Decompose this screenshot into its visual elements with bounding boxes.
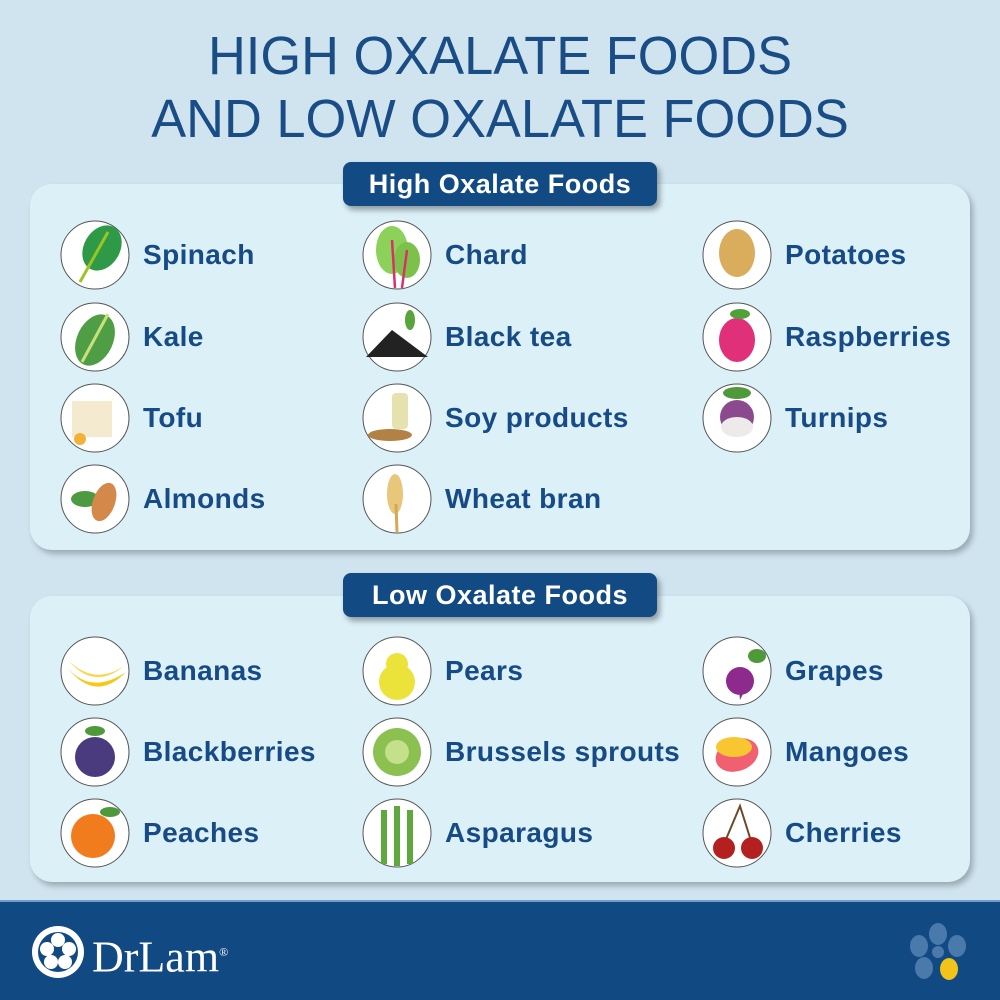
- item: peaches: Peaches: [143, 817, 259, 848]
- tab: high oxalate heading: High Oxalate Foods: [369, 169, 631, 199]
- item: cherries: [702, 798, 902, 868]
- title: AND LOW OXALATE FOODS: [151, 89, 849, 149]
- item: blackberries: [60, 718, 316, 786]
- item: almonds: [60, 464, 266, 534]
- item: chard: Chard: [445, 239, 528, 270]
- item: pears: Pears: [445, 655, 523, 686]
- tab: high oxalate heading: [343, 162, 657, 206]
- item: turnips: [702, 384, 888, 452]
- item: bananas: Bananas: [143, 655, 263, 686]
- item: potatoes: [702, 220, 906, 290]
- item: spinach: [60, 220, 255, 290]
- title: [151, 26, 849, 149]
- item: wheat bran: [362, 464, 601, 534]
- panel: high oxalate: [30, 184, 970, 550]
- item: grapes: [702, 636, 884, 706]
- item: kale: [60, 302, 204, 372]
- item: tofu: [60, 384, 203, 452]
- item: tofu: Tofu: [143, 402, 203, 433]
- item: pears: [362, 636, 523, 706]
- item: brussels sprouts: [362, 718, 680, 786]
- logo: DrLam: [32, 926, 228, 982]
- item: grapes: Grapes: [785, 655, 884, 686]
- item: chard: [362, 220, 528, 290]
- item: cherries: Cherries: [785, 817, 902, 848]
- item: black tea: Black tea: [445, 321, 572, 352]
- item: raspberries: [702, 302, 951, 372]
- item: bananas: [60, 636, 263, 706]
- tab: low oxalate heading: Low Oxalate Foods: [372, 580, 628, 610]
- title: HIGH OXALATE FOODS: [208, 26, 792, 86]
- item: spinach: Spinach: [143, 239, 255, 270]
- item: turnips: Turnips: [785, 402, 888, 433]
- item: mangoes: [702, 718, 909, 786]
- item: asparagus: [362, 798, 593, 868]
- icon: flower mark: [910, 923, 966, 980]
- panel: low oxalate: [30, 596, 970, 882]
- item: soy products: Soy products: [445, 402, 629, 433]
- item: black tea: [362, 302, 572, 372]
- item: asparagus: Asparagus: [445, 817, 593, 848]
- item: raspberries: Raspberries: [785, 321, 951, 352]
- tab: low oxalate heading: [343, 573, 657, 617]
- item: almonds: Almonds: [143, 483, 266, 514]
- item: peaches: [60, 798, 259, 868]
- footer: [0, 900, 1000, 1000]
- logo: DrLam: DrLam®: [92, 933, 228, 982]
- item: blackberries: Blackberries: [143, 736, 316, 767]
- item: brussels sprouts: Brussels sprouts: [445, 736, 680, 767]
- item: mangoes: Mangoes: [785, 736, 909, 767]
- item: potatoes: Potatoes: [785, 239, 906, 270]
- item: wheat bran: Wheat bran: [445, 483, 601, 514]
- item: kale: Kale: [143, 321, 204, 352]
- item: soy products: [362, 384, 629, 452]
